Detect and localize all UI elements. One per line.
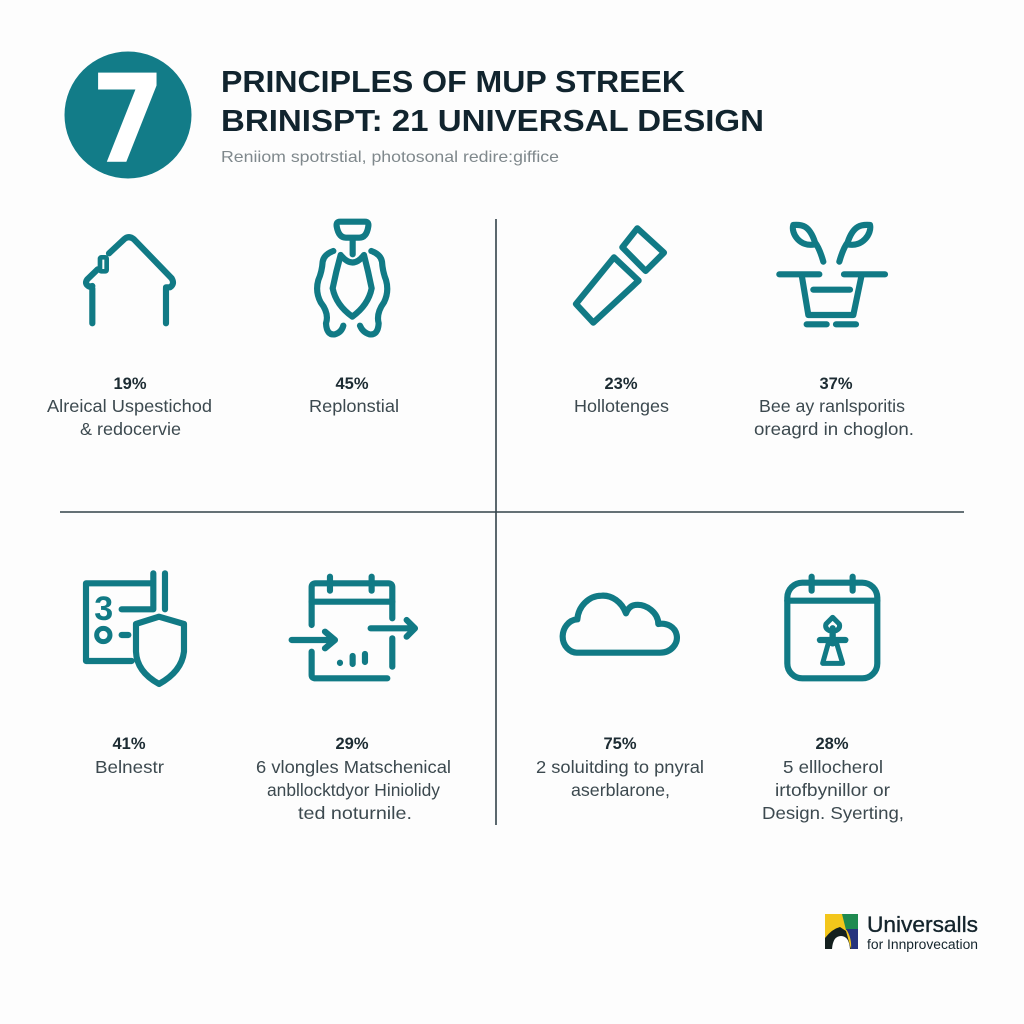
title [221, 64, 764, 138]
title: PRINCIPLES OF MUP STREEK [221, 64, 686, 99]
label [47, 396, 212, 439]
icon: house [86, 237, 173, 323]
panel: 23% marker [574, 228, 669, 416]
icon: figure with shield [317, 222, 387, 334]
icon: plant in basket [779, 225, 885, 324]
label: ted noturnile. [298, 803, 412, 823]
label [762, 757, 904, 823]
logo [825, 912, 978, 952]
label: Replonstial [309, 396, 399, 416]
label: anbllocktdyor Hiniolidy [267, 780, 440, 800]
label [536, 757, 704, 800]
logo text [867, 912, 978, 952]
badge: number 7: 7 [91, 49, 165, 191]
icon: document with shield: 3 [94, 590, 113, 628]
title: BRINISPT: 21 UNIVERSAL DESIGN [221, 103, 764, 138]
label: Belnestr [95, 757, 164, 777]
panel: 29% calendar with arrows [256, 577, 451, 823]
label: Hollotenges [574, 396, 669, 416]
stat: 19%: 19% [113, 375, 147, 393]
label: & redocervie [80, 419, 181, 439]
panel: 75% cloud [536, 596, 704, 800]
stat: 45%: 45% [335, 375, 369, 393]
header [64, 49, 764, 191]
stat: 75%: 75% [603, 735, 637, 753]
badge: number 7 [64, 49, 192, 191]
panel: 45% figure [309, 222, 399, 416]
panel: 37% plant basket [754, 225, 914, 439]
stat: 29%: 29% [335, 735, 369, 753]
panel: 19% house [47, 237, 212, 439]
label: Bee ay ranlsporitis [759, 396, 905, 416]
icon: document with shield [86, 573, 184, 684]
label: irtofbynillor or [775, 780, 890, 800]
logo text: Universalls [867, 912, 978, 937]
label: 2 soluitding to pnyral [536, 757, 704, 777]
stat: 41%: 41% [112, 735, 146, 753]
stat: 28%: 28% [815, 735, 849, 753]
icon: calendar with arrows [292, 577, 415, 678]
icon: calendar with figure [787, 577, 877, 678]
subtitle: Reniiom spotrstial, photosonal redire:giffice [221, 149, 559, 166]
icon: marker [576, 228, 664, 323]
panel: 41% document and shield [86, 573, 184, 777]
label: Design. Syerting, [762, 803, 904, 823]
logo text: for Innprovecation [867, 937, 978, 952]
icon: logo mark [825, 914, 858, 949]
label: aserblarone, [571, 780, 670, 800]
stat: 37%: 37% [819, 375, 853, 393]
label [256, 757, 451, 823]
panel: 28% calendar with figure [762, 577, 904, 823]
label [754, 396, 914, 439]
label: 5 elllocherol [783, 757, 883, 777]
label: oreagrd in choglon. [754, 419, 914, 439]
label: Alreical Uspestichod [47, 396, 212, 416]
label: 6 vlongles Matschenical [256, 757, 451, 777]
icon: cloud [563, 596, 677, 653]
stat: 23%: 23% [604, 375, 638, 393]
